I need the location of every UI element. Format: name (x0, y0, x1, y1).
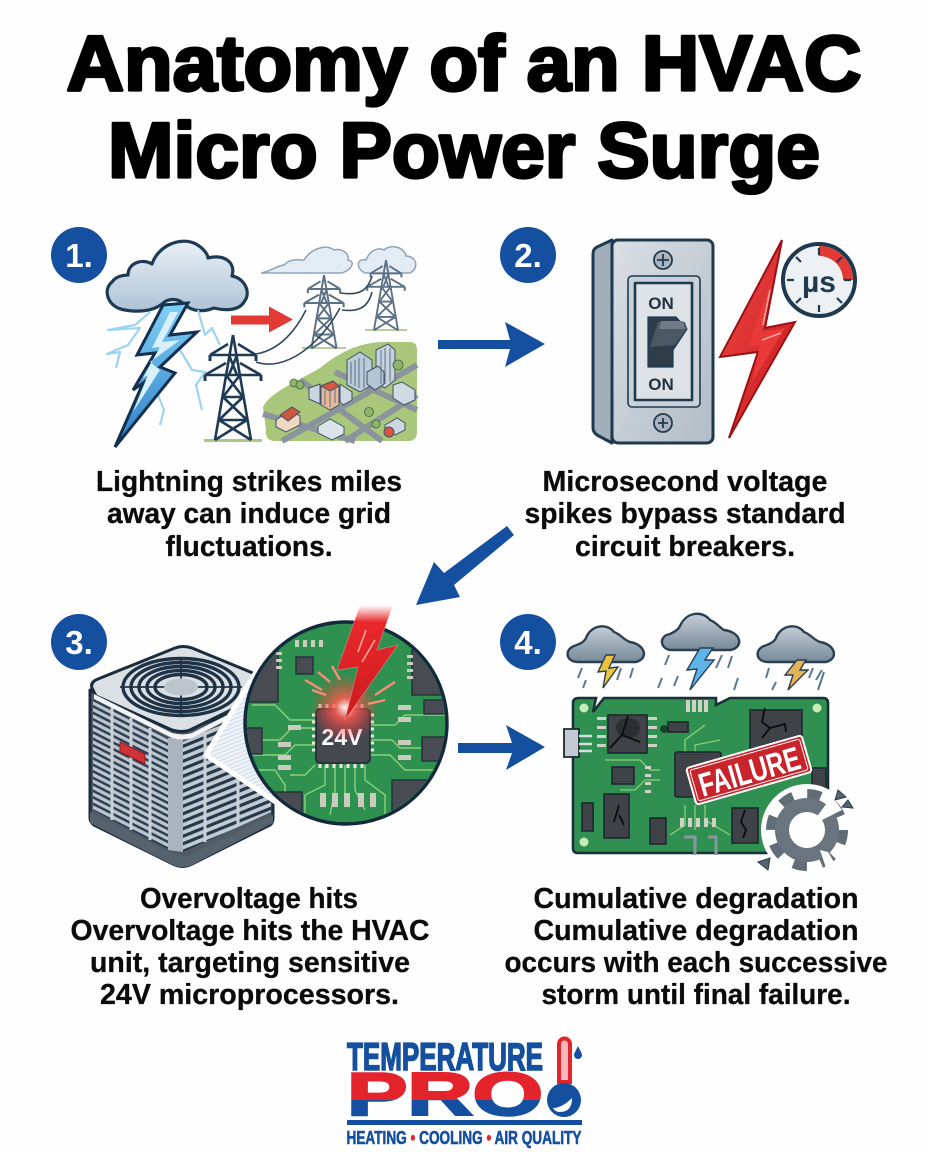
text: step 2 caption: circuit breakers. (575, 531, 795, 563)
thermometer (547, 1037, 582, 1117)
text: step 3 caption: unit, targeting sensitive (90, 947, 410, 979)
icon: storm cloud (107, 241, 247, 311)
text: step 2 caption: Microsecond voltage (542, 466, 828, 498)
text: step 1 caption: fluctuations. (166, 531, 332, 563)
icon: storm clouds (568, 614, 834, 690)
arrow: red (231, 306, 293, 332)
labels: ON (648, 294, 674, 394)
text: step 3 caption: Overvoltage hits the HVAC (70, 915, 430, 947)
text: step 4 caption: Cumulative degradation (534, 915, 858, 947)
icon: circuit board (564, 698, 828, 855)
text: step 3 caption: 24V microprocessors. (100, 979, 399, 1011)
icon: broken gear (758, 784, 853, 880)
text: step 2 caption: spikes bypass standard (524, 498, 846, 530)
sparks (311, 674, 379, 742)
callout wedge (206, 672, 280, 805)
badge 4: 4. (514, 624, 542, 661)
badge 1 (51, 227, 107, 283)
labels: ON: ON (648, 294, 674, 313)
logo: Temperature Pro: TEMPERATURE (347, 1036, 543, 1079)
icon: city map (263, 342, 417, 441)
icon: distant clouds (261, 247, 416, 273)
panel 1: lightning and grid (51, 227, 417, 447)
arrow: step 1 to step 2 (438, 322, 545, 367)
panel 2: switch and voltage spike (500, 227, 855, 443)
text: step 4 caption: storm until final failure. (542, 979, 850, 1011)
badge 3: 3. (65, 624, 93, 661)
text: step 2 caption (524, 466, 846, 563)
icon: side lightning branches (107, 310, 220, 425)
icon: transmission tower near (204, 335, 262, 442)
logo: Temperature Pro: HEATING • COOLING • AIR QUALITY (346, 1128, 582, 1148)
panel 4: damaged board (500, 614, 853, 880)
arrow: step 3 to step 4 (458, 725, 545, 770)
badge 2: 2. (514, 237, 542, 274)
failure stamp: FAILURE (694, 739, 804, 804)
central 24V chip: 24V (322, 724, 363, 750)
traces (252, 704, 445, 815)
panel 3: HVAC unit with zoomed board (51, 605, 455, 867)
icon: condenser unit (90, 646, 273, 867)
bolt into chip (337, 605, 398, 720)
text: step 3 caption (70, 883, 430, 1011)
icon: red lightning bolt (720, 240, 795, 438)
title: Micro Power Surge (108, 106, 820, 194)
icon: main lightning bolt (115, 303, 197, 447)
text: step 3 caption: Overvoltage hits (140, 883, 358, 915)
logo: Temperature Pro: PRO (347, 1061, 543, 1128)
failure stamp (686, 735, 812, 806)
icon: wall switch (593, 240, 713, 443)
badge 1: 1. (65, 237, 93, 274)
title: Anatomy of an HVAC (66, 19, 862, 107)
title (66, 19, 862, 194)
icon: transmission tower middle (302, 275, 346, 349)
power lines (256, 276, 372, 364)
dark chips (247, 649, 445, 812)
icon: transmission tower far (365, 260, 407, 331)
badge 3 (51, 614, 107, 670)
arrow: step 2 to step 3 (416, 526, 514, 605)
icon: microsecond timer: µs (802, 266, 836, 299)
badge 2 (500, 227, 556, 283)
text: step 4 caption (504, 883, 888, 1011)
text: step 4 caption: occurs with each successive (504, 947, 888, 979)
text: step 4 caption: Cumulative degradation (534, 883, 858, 915)
text: step 1 caption: Lightning strikes miles (96, 466, 402, 498)
icon: microsecond timer (783, 244, 855, 316)
central 24V chip (312, 704, 374, 768)
text: step 1 caption: away can induce grid (107, 498, 391, 530)
logo: Temperature Pro (346, 1036, 582, 1148)
icon: connector (564, 729, 579, 757)
cracks and scorches (610, 708, 786, 838)
zoomed circuit board (240, 605, 455, 832)
badge 4 (500, 614, 556, 670)
labels: ON: ON (648, 375, 674, 394)
text: step 1 caption (96, 466, 402, 563)
